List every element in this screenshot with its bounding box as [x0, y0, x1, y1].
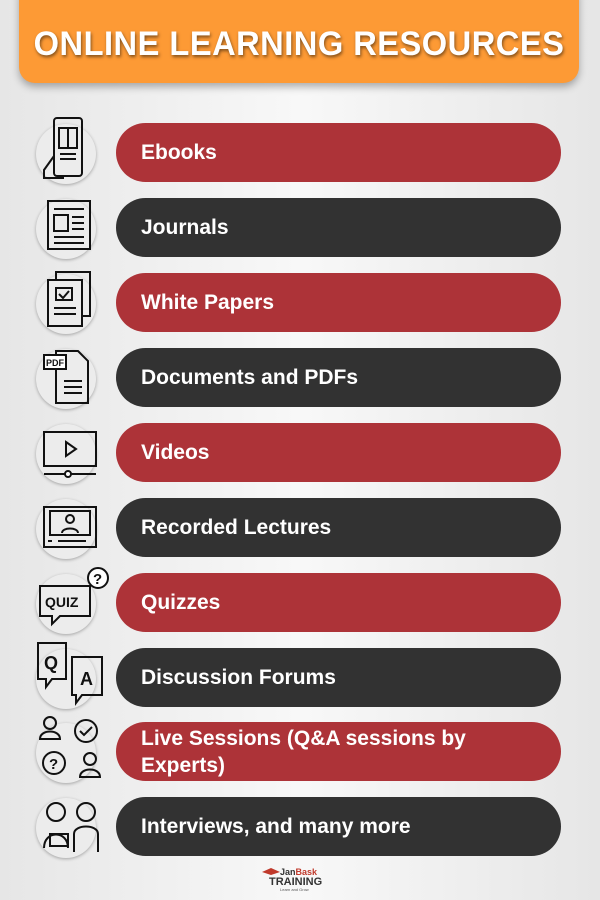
- pill: Ebooks: Ebooks: [141, 141, 217, 164]
- icon: journal: [47, 200, 91, 250]
- icon: pdf: PDF: [46, 358, 65, 368]
- icon: people: [39, 716, 101, 778]
- icon: video: [43, 431, 97, 478]
- icon: Q&A: Q: [44, 653, 58, 673]
- icon: people: ?: [49, 756, 58, 773]
- pill: Live Sessions: Live Sessions (Q&A sessions by: [141, 726, 466, 750]
- pill: Documents: [116, 348, 561, 407]
- pill: Ebooks: [116, 123, 561, 182]
- pill: Videos: Videos: [141, 441, 209, 464]
- pill: Journals: Journals: [141, 216, 229, 239]
- logo: [262, 867, 322, 892]
- pill: Recorded Lectures: Recorded Lectures: [141, 516, 331, 539]
- pill: Discussion Forums: [116, 648, 561, 707]
- logo: TRAINING: [269, 876, 322, 888]
- title: ONLINE LEARNING RESOURCES: [34, 25, 564, 63]
- logo: Learn and Grow: [280, 887, 309, 892]
- row: Quizzes: [34, 567, 561, 637]
- row: Recorded Lectures: [34, 498, 561, 562]
- row: Discussion Forums: [34, 642, 561, 712]
- pill: Documents: Documents and PDFs: [141, 366, 358, 389]
- pill: Discussion Forums: Discussion Forums: [141, 666, 336, 689]
- icon: pdf: [43, 350, 89, 404]
- row: Live Sessions: [34, 716, 561, 786]
- row: Interviews: [34, 797, 561, 861]
- pill: Interviews: [116, 797, 561, 856]
- row: Ebooks: [34, 117, 561, 187]
- pill: Journals: [116, 198, 561, 257]
- pill: Interviews: Interviews, and many more: [141, 815, 411, 838]
- icon: lecture: [43, 506, 97, 548]
- icon: quiz: [39, 567, 109, 626]
- icon: tablet book: [43, 117, 83, 179]
- icon: Q&A: A: [80, 669, 93, 689]
- title: [19, 0, 579, 83]
- pill: Quizzes: [116, 573, 561, 632]
- icon: Q&A: [37, 642, 103, 706]
- pill: White Papers: White Papers: [141, 291, 274, 314]
- row: Documents: [34, 348, 561, 412]
- icon: quiz: QUIZ: [45, 594, 79, 610]
- pill: Live Sessions: Experts): [141, 754, 225, 776]
- icon: interview: [43, 802, 99, 852]
- pill: Videos: [116, 423, 561, 482]
- pill: Live Sessions: [116, 722, 561, 781]
- logo: JanBask: [280, 867, 318, 877]
- pill: Quizzes: Quizzes: [141, 591, 220, 614]
- pill: White Papers: [116, 273, 561, 332]
- row: Videos: [34, 423, 561, 487]
- icon: papers check: [47, 271, 91, 327]
- row: Journals: [34, 198, 561, 262]
- pill: Recorded Lectures: [116, 498, 561, 557]
- icon: quiz: ?: [93, 571, 102, 588]
- row: White Papers: [34, 271, 561, 337]
